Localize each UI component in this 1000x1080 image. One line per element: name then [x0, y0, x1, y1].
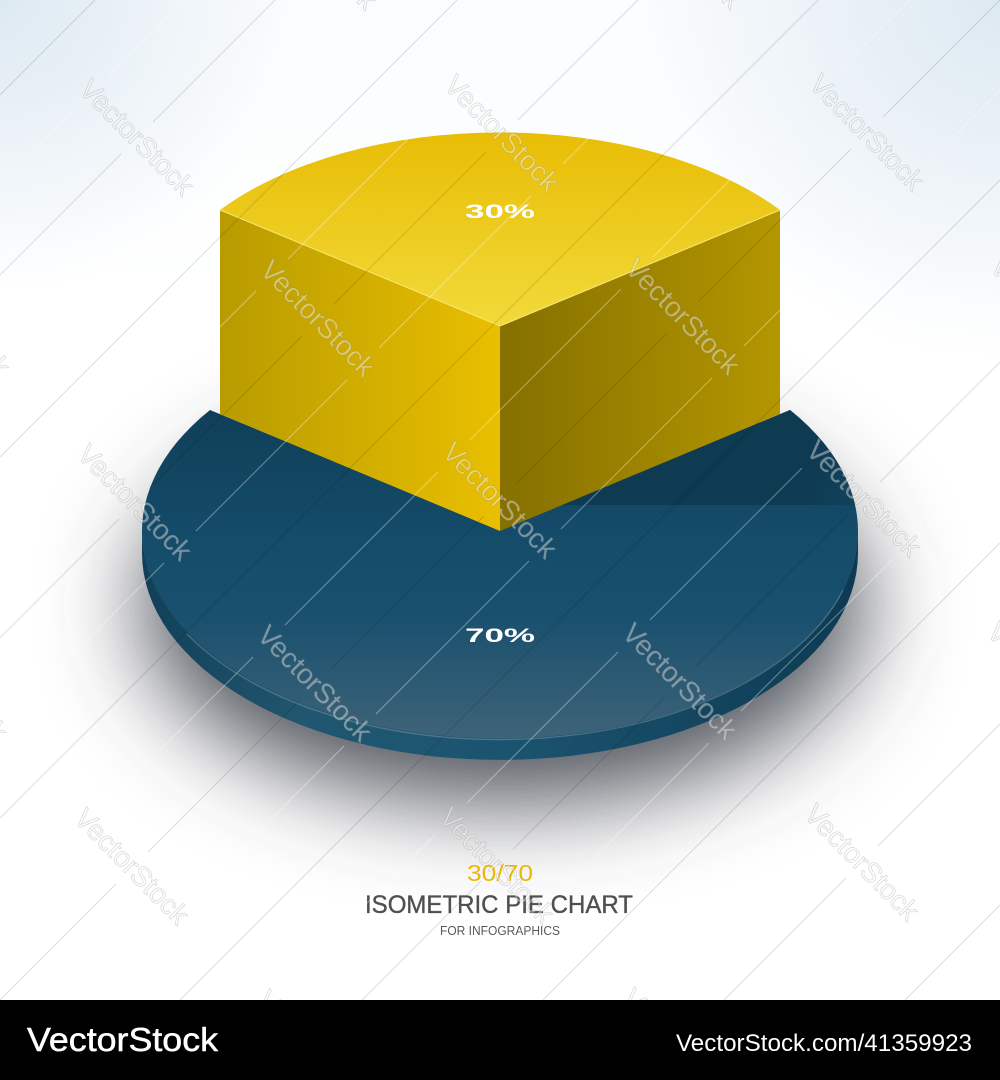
- main title: ISOMETRIC PIE CHART: [365, 891, 633, 919]
- ratio heading: 30/70: [467, 860, 533, 886]
- watermark text: VectorStock: [251, 619, 379, 748]
- blue slice rim highlight: [187, 590, 843, 740]
- footer reference: VectorStock.com/41359923: [676, 1030, 972, 1057]
- watermark text: VectorStock: [803, 68, 931, 197]
- watermark text: VectorStock: [73, 73, 201, 202]
- cast shadow on blue slice: [562, 410, 855, 505]
- blue slice top (70%): [142, 410, 858, 738]
- watermark text: VectorStock: [798, 798, 926, 927]
- watermark text: VectorStock: [438, 69, 566, 198]
- yellow block edge highlight: [220, 210, 780, 326]
- watermark text: VectorStock: [616, 617, 744, 746]
- watermark text: VectorStock: [433, 801, 561, 930]
- watermark text: VectorStock: [68, 802, 196, 931]
- watermark text: VectorStock: [71, 438, 199, 567]
- footer brand: VectorStock: [27, 1021, 219, 1058]
- blue slice side: [142, 531, 858, 760]
- yellow block left face: [220, 210, 500, 531]
- yellow block right face: [500, 210, 780, 531]
- watermark text: VectorStock: [800, 434, 928, 563]
- watermark text: VectorStock: [254, 254, 382, 383]
- pie chart: [142, 132, 860, 760]
- subtitle: FOR INFOGRAPHICS: [440, 924, 560, 938]
- watermark text: VectorStock: [619, 252, 747, 381]
- ground shadow: [143, 408, 863, 802]
- watermark text: VectorStock: [436, 436, 564, 565]
- yellow block top (30%): [220, 132, 780, 326]
- label 70%: 70%: [465, 626, 535, 647]
- footer bar: [0, 1000, 1000, 1080]
- label 30%: 30%: [465, 202, 535, 223]
- title block: [365, 860, 633, 938]
